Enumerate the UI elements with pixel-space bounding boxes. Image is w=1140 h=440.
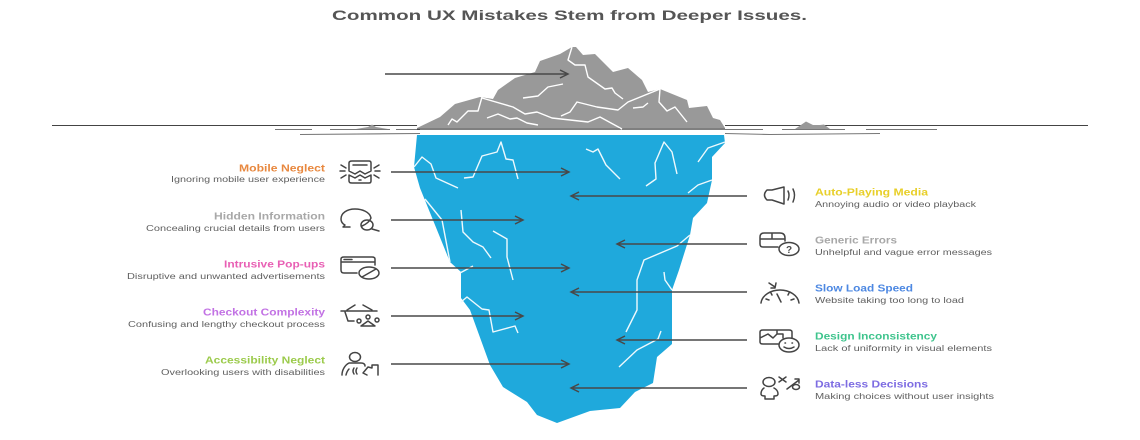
item: Generic Errors: ? — [786, 245, 792, 256]
item: Checkout Complexity — [128, 305, 379, 329]
item: Slow Load Speed — [761, 283, 964, 305]
item: Generic Errors: Generic Errors — [815, 236, 897, 246]
item: Accessibility Neglect: Overlooking users with disabilities — [161, 368, 325, 377]
icon: speech bubble with magnifier — [341, 209, 371, 227]
item: Auto-Playing Media: Annoying audio or video playback — [815, 200, 977, 209]
icon: person with choice symbols — [763, 378, 775, 386]
item: Data-less Decisions: Making choices without user insights — [815, 392, 994, 401]
item: Design Inconsistency: Design Inconsistency — [815, 332, 938, 342]
arrow: tip of the iceberg — [385, 70, 568, 78]
arrows: left items — [391, 168, 569, 368]
item: Generic Errors — [760, 233, 992, 257]
item: Intrusive Pop-ups: Disruptive and unwanted advertisements — [127, 272, 325, 281]
item: Data-less Decisions — [761, 377, 994, 401]
iceberg above water — [417, 47, 725, 129]
item: Design Inconsistency: Lack of uniformity in visual elements — [815, 344, 992, 353]
arrows: right items — [571, 192, 747, 392]
title: Common UX Mistakes Stem from Deeper Issues. — [332, 7, 807, 23]
icon: shopping basket with people — [341, 305, 377, 321]
icon: broken phone — [340, 161, 380, 183]
item: Intrusive Pop-ups — [127, 257, 379, 281]
icon: blocked popup window — [341, 257, 375, 273]
icon: speed gauge — [761, 283, 799, 303]
distant small ice rock right — [795, 122, 830, 129]
icon: inconsistent layout with smiley — [760, 330, 792, 344]
item: Checkout Complexity: Confusing and lengthy checkout process — [128, 320, 325, 329]
item: Accessibility Neglect — [161, 352, 378, 377]
water surface lines — [52, 126, 1088, 134]
item: Slow Load Speed: Slow Load Speed — [815, 284, 913, 294]
icon: error box with question mark — [760, 233, 785, 247]
icon: person with hand — [350, 352, 360, 362]
item: Auto-Playing Media — [764, 187, 977, 209]
item: Hidden Information — [146, 209, 379, 233]
item: Mobile Neglect — [171, 161, 380, 184]
item: Generic Errors: Unhelpful and vague error messages — [815, 248, 992, 257]
item: Design Inconsistency — [760, 330, 992, 353]
distant small ice rock left — [356, 124, 388, 129]
item: Auto-Playing Media: Auto-Playing Media — [815, 188, 929, 198]
item: Hidden Information: Hidden Information — [214, 212, 325, 222]
icon: speaker — [764, 187, 794, 204]
item: Slow Load Speed: Website taking too long to load — [815, 296, 964, 305]
iceberg below water — [414, 135, 725, 423]
item: Hidden Information: Concealing crucial details from users — [146, 224, 325, 233]
item: Mobile Neglect: Mobile Neglect — [239, 164, 326, 174]
item: Mobile Neglect: Ignoring mobile user experience — [171, 175, 326, 184]
item: Intrusive Pop-ups: Intrusive Pop-ups — [224, 260, 326, 270]
item: Data-less Decisions: Data-less Decisions — [815, 380, 929, 390]
item: Checkout Complexity: Checkout Complexity — [203, 308, 326, 318]
item: Accessibility Neglect: Accessibility Neglect — [205, 356, 326, 366]
